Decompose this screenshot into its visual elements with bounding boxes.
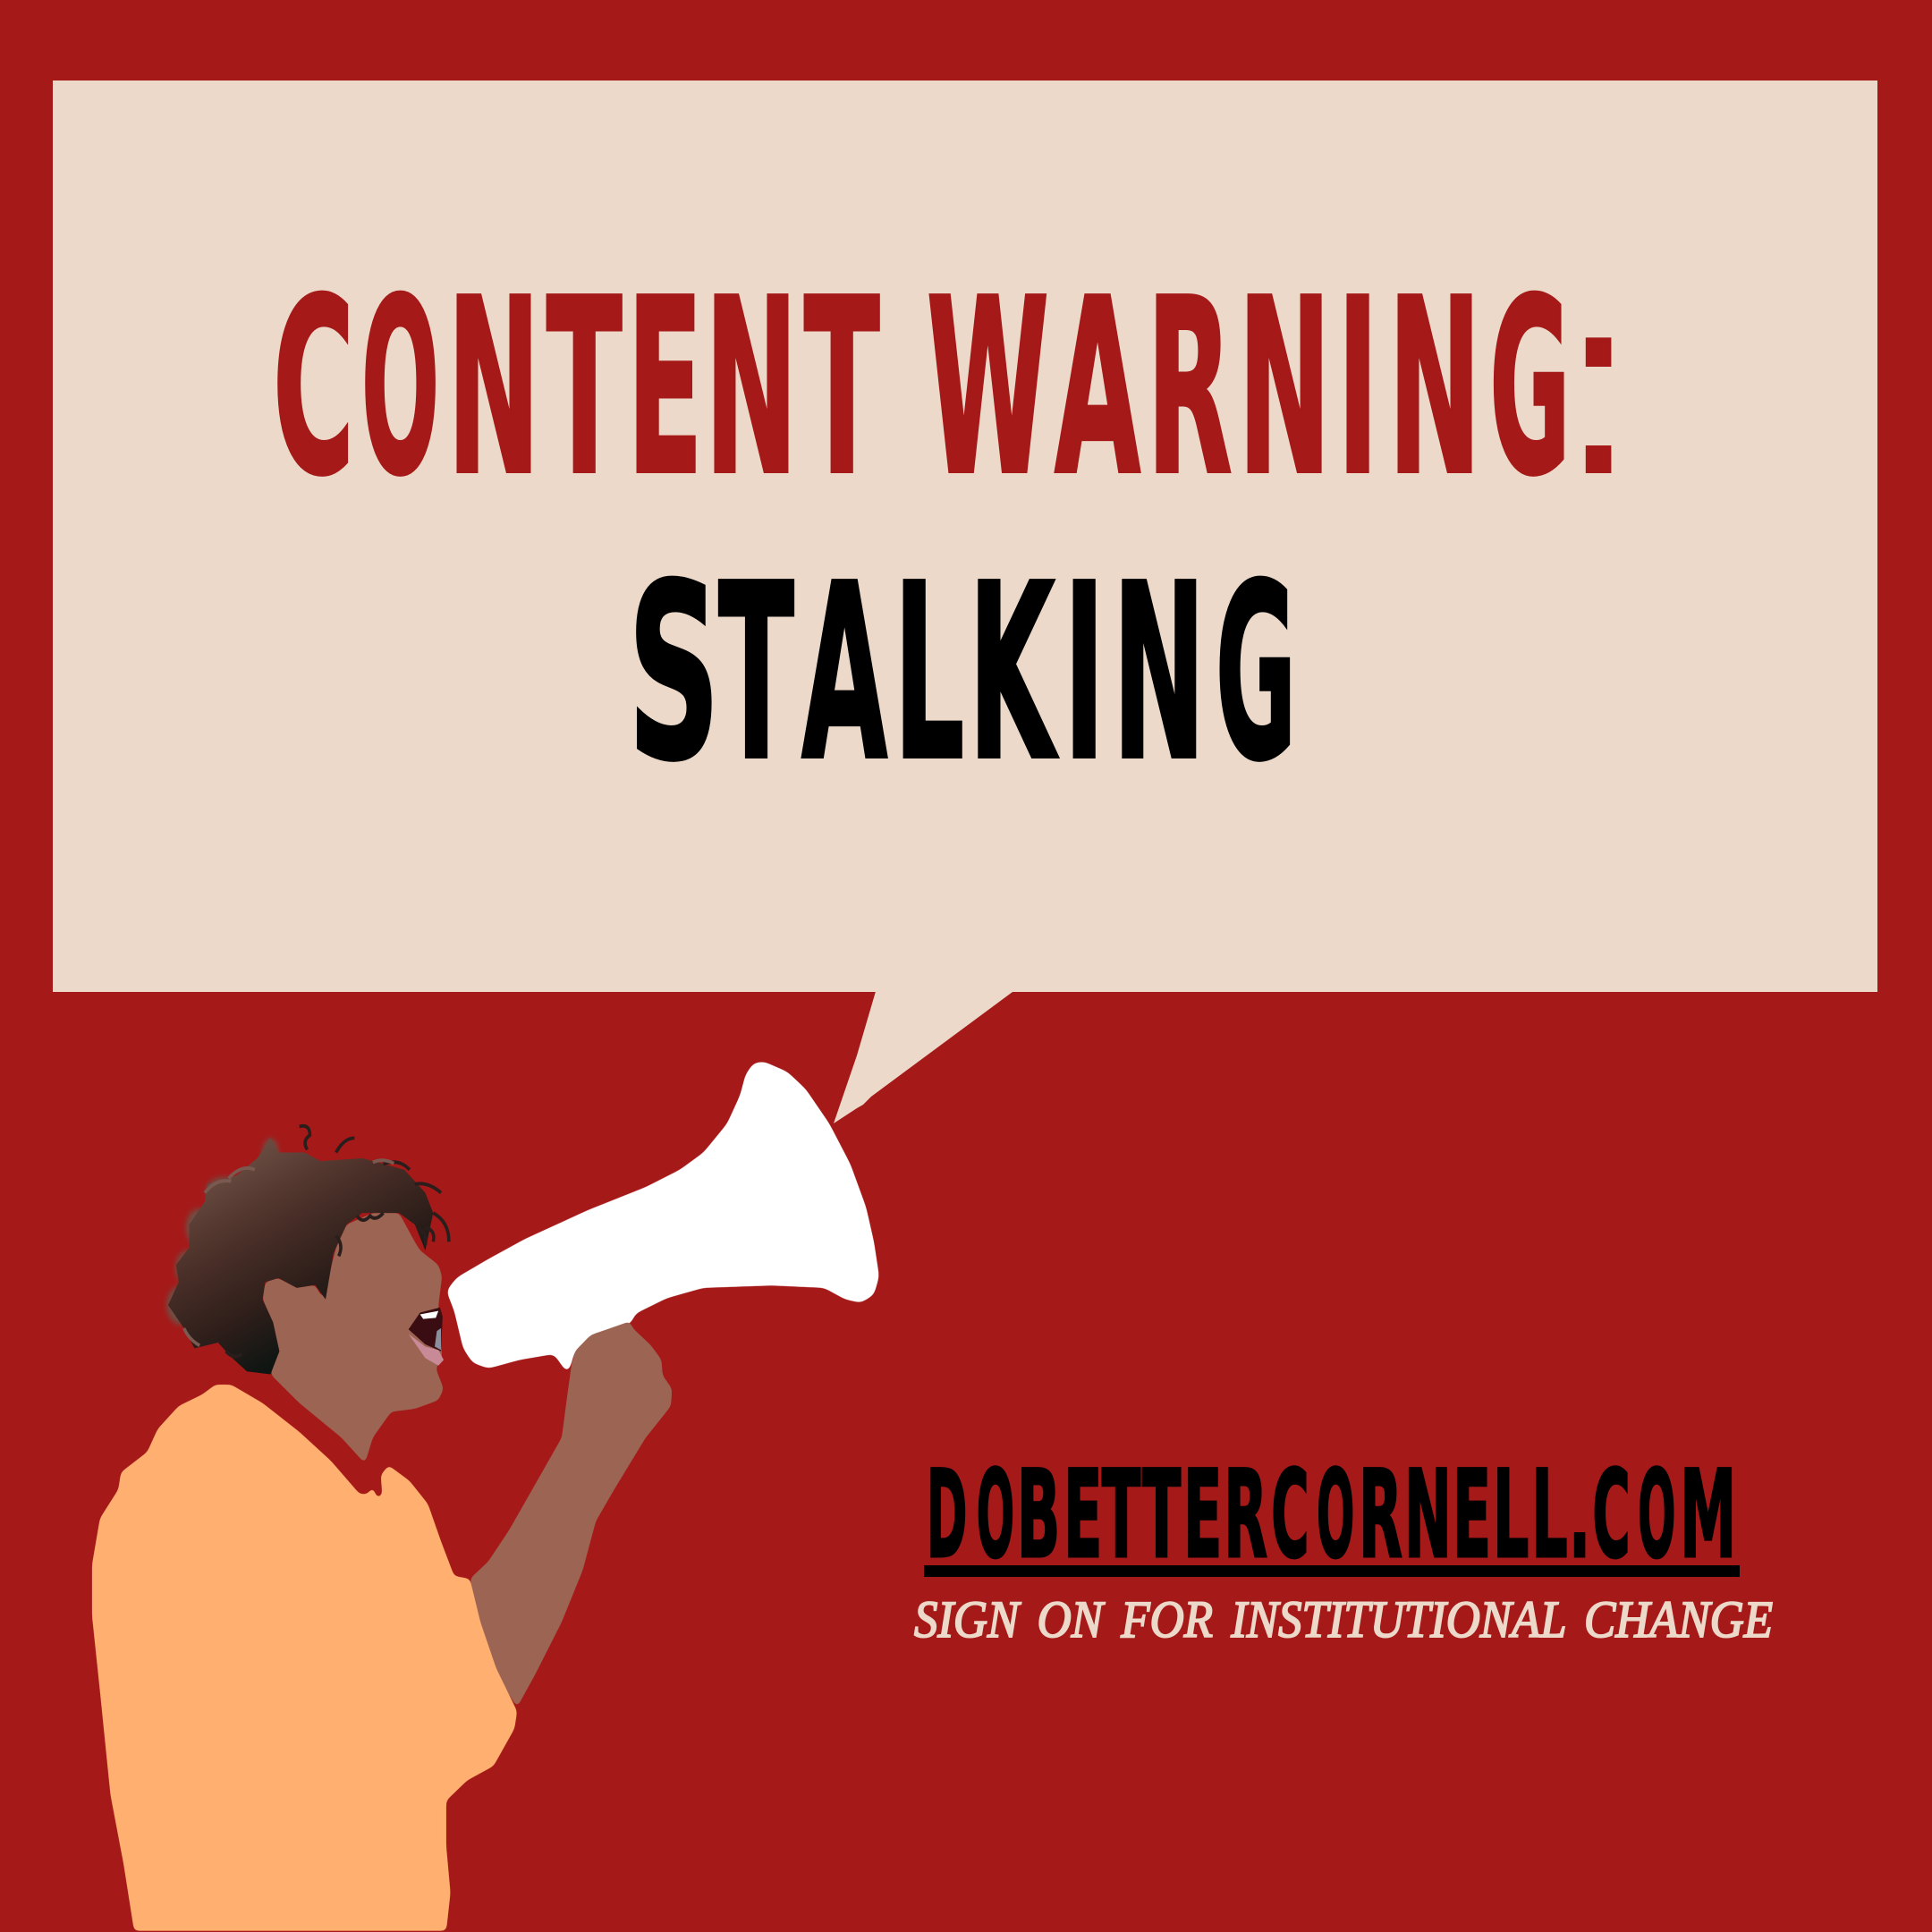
website link: R xyxy=(1359,1445,1402,1585)
light curls xyxy=(184,1160,394,1345)
website link: E xyxy=(1063,1445,1102,1585)
website link xyxy=(924,1445,1740,1585)
heading: stalking: N xyxy=(1113,532,1206,814)
website link: B xyxy=(1017,1445,1060,1585)
heading: content warning xyxy=(273,247,1625,529)
heading: content warning: O xyxy=(361,247,439,529)
heading: content warning: T xyxy=(804,247,880,529)
website link: D xyxy=(927,1445,967,1585)
megaphone xyxy=(446,1062,879,1374)
fist xyxy=(564,1321,672,1467)
heading: content warning: N xyxy=(447,247,540,529)
heading: stalking: I xyxy=(1063,532,1105,814)
website link: L xyxy=(1531,1445,1568,1585)
mouth xyxy=(409,1308,444,1366)
heading: content warning: I xyxy=(1337,247,1378,529)
website link: C xyxy=(1592,1445,1631,1585)
heading: stalking: S xyxy=(628,532,720,814)
heading: content warning: T xyxy=(547,247,623,529)
illustration: person with megaphone xyxy=(92,1062,879,1931)
heading: content warning: N xyxy=(705,247,798,529)
heading: content warning: N xyxy=(1238,247,1331,529)
website link: E xyxy=(1183,1445,1222,1585)
heading: content warning: N xyxy=(1388,247,1481,529)
website link: N xyxy=(1404,1445,1452,1585)
shirt xyxy=(92,1385,517,1931)
website link: E xyxy=(1453,1445,1491,1585)
website link: . xyxy=(1569,1445,1590,1585)
heading: stalking: A xyxy=(801,532,887,814)
dark curls xyxy=(226,1126,449,1356)
heading: stalking: K xyxy=(969,532,1058,814)
heading: content warning: E xyxy=(627,247,703,529)
heading: content warning: C xyxy=(273,247,354,529)
website link: O xyxy=(1317,1445,1354,1585)
website link: T xyxy=(1142,1445,1181,1585)
heading: stalking: G xyxy=(1216,532,1296,814)
heading: stalking xyxy=(628,532,1296,814)
heading: content warning: R xyxy=(1147,247,1233,529)
website link: O xyxy=(1638,1445,1675,1585)
website link: O xyxy=(977,1445,1014,1585)
heading: content warning: : xyxy=(1572,247,1625,529)
heading: stalking: L xyxy=(894,532,964,814)
colon trim xyxy=(1581,367,1621,445)
hair lobes xyxy=(166,1139,278,1325)
heading: content warning: G xyxy=(1489,247,1571,529)
website link: T xyxy=(1102,1445,1140,1585)
tagline: SIGN ON FOR INSTITUTIONAL CHANGE xyxy=(914,1590,1773,1648)
arm xyxy=(470,1321,672,1707)
website link: M xyxy=(1680,1445,1736,1585)
website link: L xyxy=(1493,1445,1529,1585)
hair xyxy=(166,1126,449,1374)
head xyxy=(263,1213,444,1463)
heading: stalking: T xyxy=(718,532,794,814)
website link: C xyxy=(1271,1445,1309,1585)
website link: R xyxy=(1224,1445,1267,1585)
heading: content warning: W xyxy=(927,247,1049,529)
heading: content warning: A xyxy=(1055,247,1140,529)
speech bubble xyxy=(53,80,1877,1123)
